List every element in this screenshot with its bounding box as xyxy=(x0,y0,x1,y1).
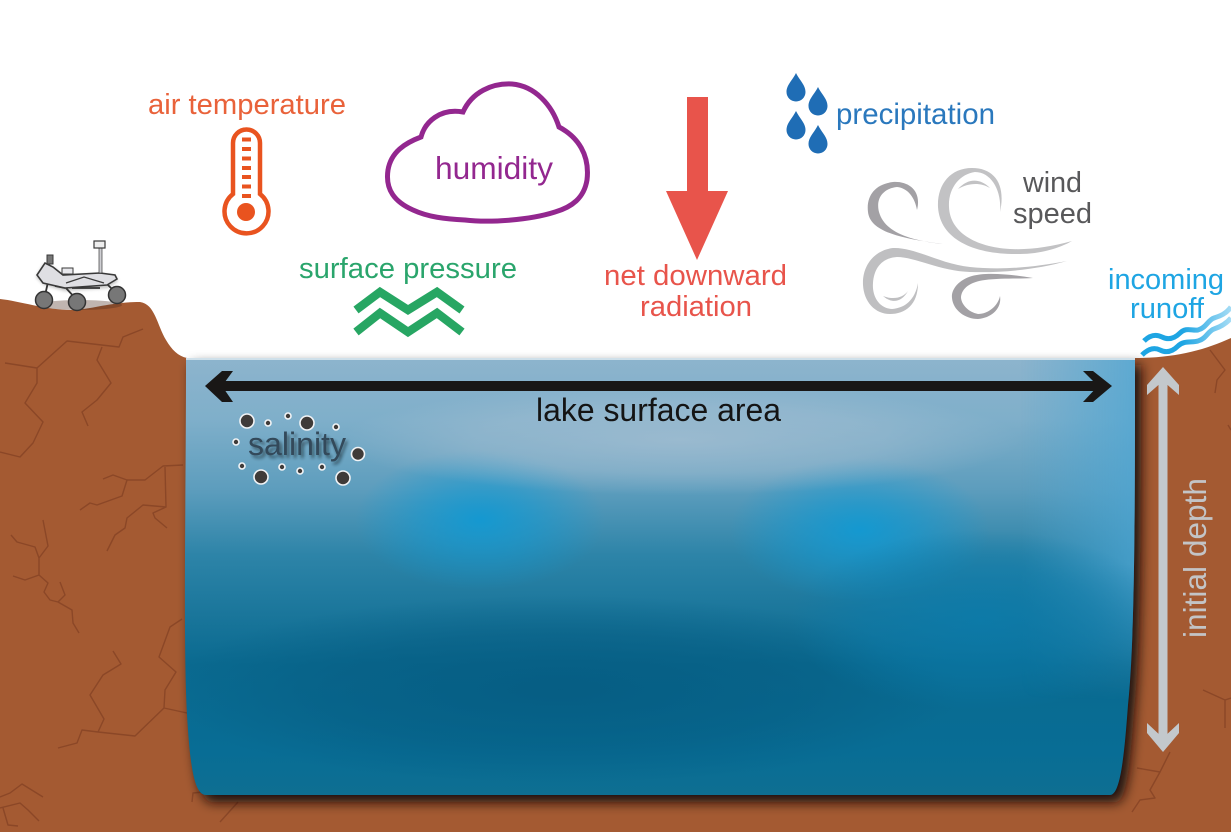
label: air temperature: air temperature xyxy=(148,89,346,121)
lake water xyxy=(160,355,1170,800)
label: wind speed xyxy=(1013,167,1092,230)
label: net downward radiation xyxy=(604,260,787,323)
initial depth arrow xyxy=(1147,367,1179,752)
icon: wind xyxy=(863,168,1072,319)
icon: pressure zigzag xyxy=(356,292,462,332)
label: lake surface area: lake surface area xyxy=(536,392,781,428)
salinity: salinity xyxy=(251,429,348,465)
salinity particles xyxy=(233,413,364,485)
label: incoming runoff: incoming xyxy=(1108,264,1224,296)
salinity xyxy=(233,413,364,485)
icon: precipitation drops xyxy=(786,73,828,154)
icon: thermometer xyxy=(224,130,268,233)
label: humidity: humidity xyxy=(435,150,553,186)
icon: runoff waves xyxy=(1142,307,1231,355)
label: incoming runoff: runoff xyxy=(1130,293,1205,325)
label: wind speed: speed xyxy=(1013,198,1092,230)
label: initial depth: initial depth xyxy=(1177,478,1213,638)
lake shadow xyxy=(191,365,1141,802)
icon: rover xyxy=(36,241,126,310)
terrain xyxy=(0,299,1231,832)
label: net downward radiation: net downward xyxy=(604,260,787,292)
ground cracks xyxy=(0,329,1231,826)
lake surface area arrow xyxy=(205,371,1112,402)
label: surface pressure: surface pressure xyxy=(299,253,517,285)
icon: radiation arrow xyxy=(666,97,728,260)
label: wind speed: wind xyxy=(1022,167,1082,199)
label: incoming runoff xyxy=(1108,264,1224,325)
icon: humidity cloud xyxy=(387,84,587,221)
label: net downward radiation: radiation xyxy=(640,291,752,323)
label: salinity: salinity xyxy=(248,426,346,462)
label: precipitation: precipitation xyxy=(836,98,995,131)
